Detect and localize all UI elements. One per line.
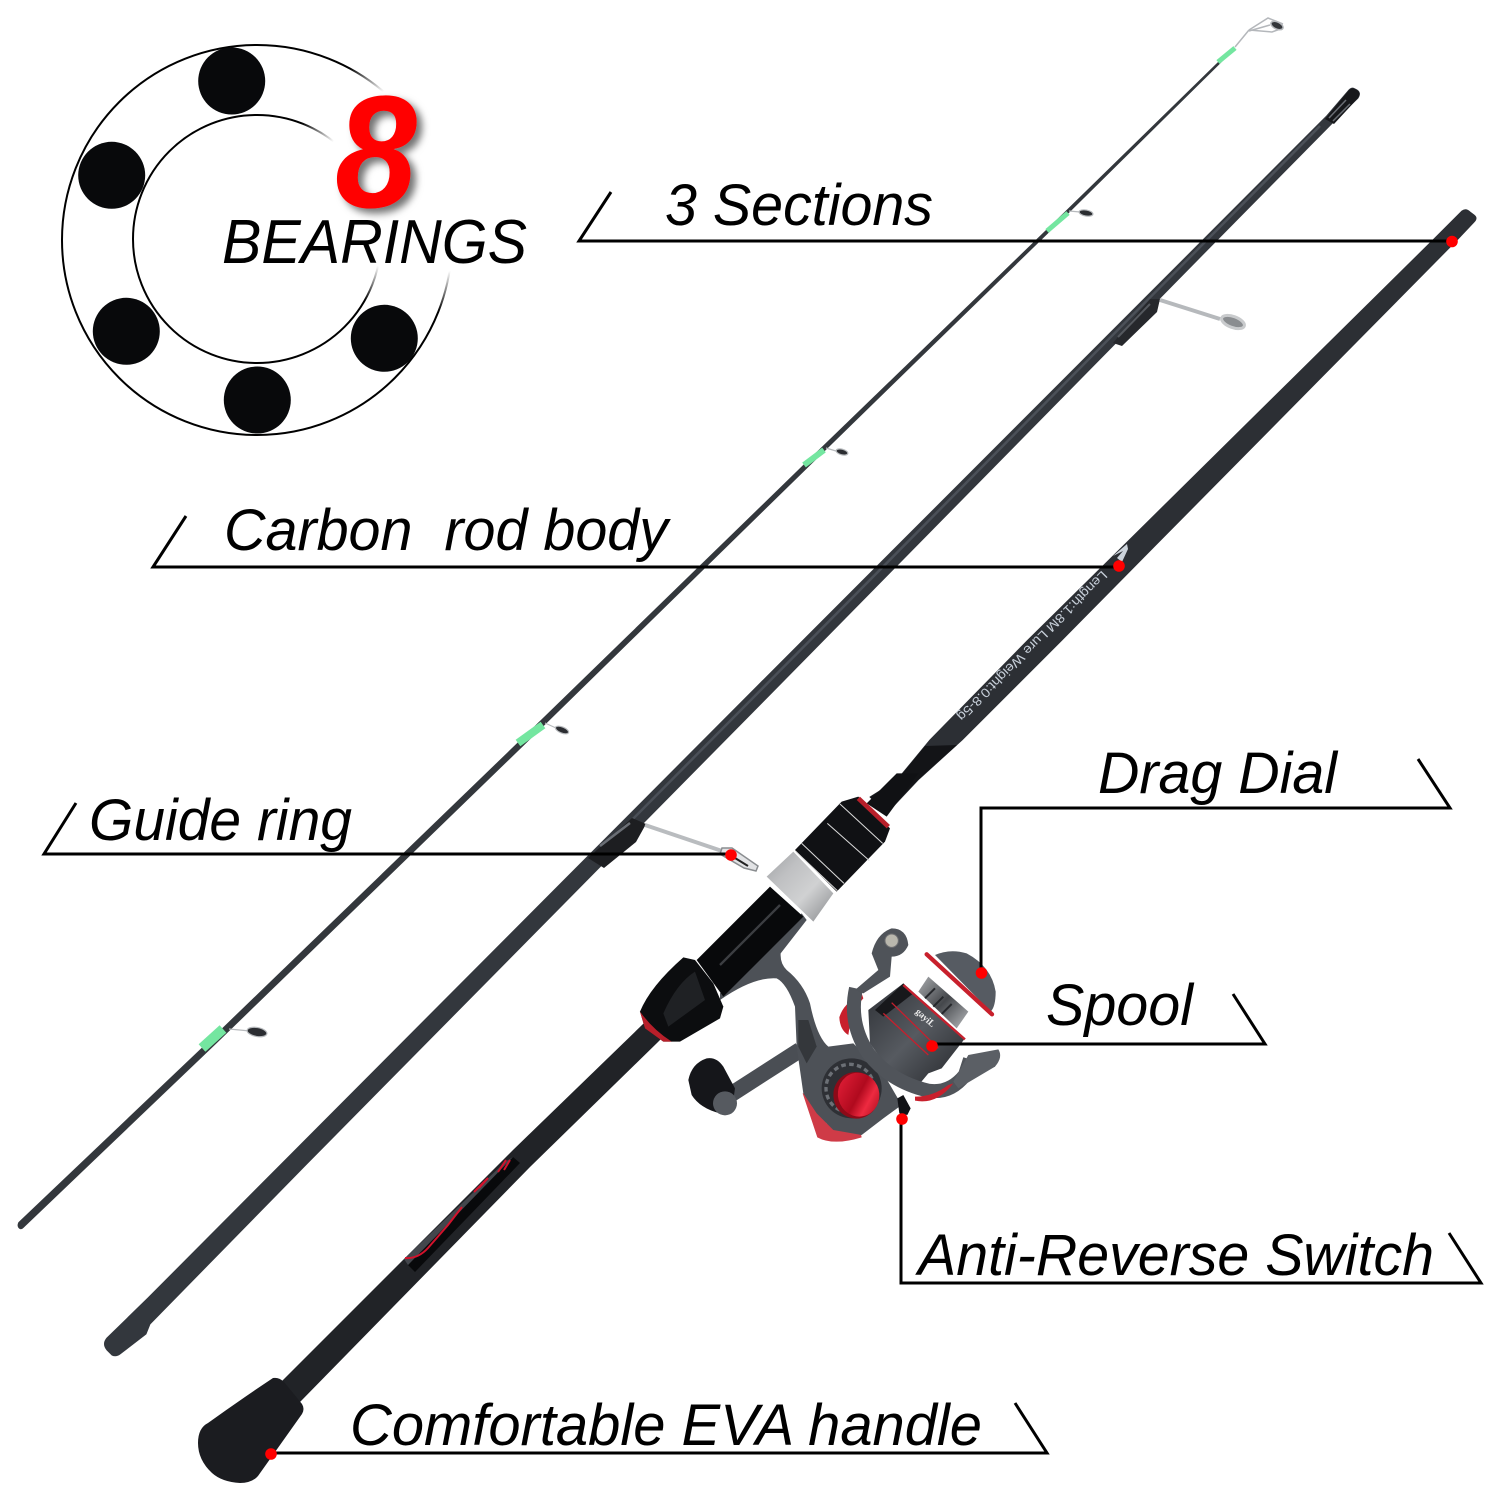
winding white stripes [796, 804, 883, 891]
middle blank [104, 88, 1359, 1356]
outer race [62, 45, 452, 435]
red spool flange [927, 954, 992, 1014]
callout: Comfortable EVA handle: Comfortable EVA handle [350, 1393, 982, 1458]
blank highlight [620, 126, 1320, 832]
bearing balls [78, 48, 418, 434]
rotor frame lower red accent [915, 1083, 953, 1101]
neck rod to collar [867, 773, 918, 817]
rod grip and spinning reel [640, 773, 1000, 1142]
green thread wraps [202, 48, 1235, 1048]
cup brand text: gayiL [913, 1007, 937, 1030]
callout: Spool [926, 973, 1265, 1052]
hood red ring [640, 1012, 672, 1042]
lower butt blank [272, 1007, 675, 1410]
upper butt blank [870, 210, 1476, 813]
rod logo mark [1113, 544, 1128, 562]
callout: Anti-Reverse Switch [896, 1113, 1481, 1288]
callout: Guide ring: Guide ring [89, 788, 352, 853]
rotor cup [868, 983, 965, 1083]
callout: 3 Sections [579, 173, 1458, 247]
bail screw [885, 934, 898, 947]
cup top dark edge [875, 983, 913, 1017]
stem shadow fold [798, 1020, 817, 1063]
red script decal [405, 1160, 510, 1258]
reel stem and gearbox [720, 913, 902, 1135]
spool body [918, 977, 968, 1028]
callout: Drag Dial [976, 741, 1450, 979]
drag knob [935, 951, 996, 1012]
tip blank [18, 55, 1227, 1229]
silver ring [767, 852, 833, 922]
big number 8: 8 [335, 62, 417, 241]
EVA handle [198, 1378, 304, 1483]
gearbox dial [822, 1058, 882, 1118]
callout: Drag Dial: Drag Dial [1098, 741, 1339, 806]
ferrule slots [1329, 100, 1350, 121]
BEARINGS heading: BEARINGS [222, 208, 527, 277]
red side cap [828, 1067, 885, 1124]
rod butt section [198, 210, 1476, 1483]
dial knurled ring [826, 1064, 874, 1112]
crank knob [688, 1058, 735, 1113]
bearing diagram [62, 45, 551, 435]
callout: Guide ring [44, 788, 737, 861]
crank arm [730, 1050, 800, 1095]
callout: Spool: Spool [1046, 973, 1195, 1038]
seat tube highlight [720, 905, 780, 965]
cup red rings [883, 985, 965, 1055]
callout: Anti-Reverse Switch: Anti-Reverse Switch [915, 1223, 1434, 1288]
hood reflection [663, 972, 705, 1027]
upper guide [1113, 299, 1246, 346]
ferrule top [1325, 88, 1359, 124]
crank end cap [713, 1091, 737, 1115]
foregrip hood [640, 957, 723, 1042]
rod tip section [18, 18, 1284, 1229]
spool dark grooves [925, 988, 952, 1014]
race fade behind the number [289, 47, 551, 313]
foregrip seat tube [697, 887, 803, 997]
callout: 3 Sections: 3 Sections [665, 173, 933, 238]
right rotor arm [953, 1049, 1000, 1088]
left red guard [839, 993, 863, 1035]
callout: Carbon rod body: Carbon rod body [224, 498, 671, 563]
rod spec text: Length:1.8M Lure Weight:0.8-5g [954, 568, 1110, 724]
decal grey stripe [404, 1157, 513, 1265]
gearbox red underside [803, 1093, 862, 1142]
black winding check [795, 797, 890, 892]
small guides [229, 209, 1093, 1038]
tip top guide [1235, 18, 1284, 47]
decal slot [408, 1157, 520, 1272]
rod middle section [104, 88, 1359, 1356]
lower guide [588, 818, 758, 871]
neck red ring [858, 798, 888, 827]
callout: Carbon rod body [153, 498, 1125, 572]
bail arm [855, 928, 908, 993]
rotor frame [854, 988, 970, 1091]
inner race [133, 115, 381, 363]
anti-reverse switch [897, 1095, 911, 1115]
neck dark portion [870, 745, 957, 813]
